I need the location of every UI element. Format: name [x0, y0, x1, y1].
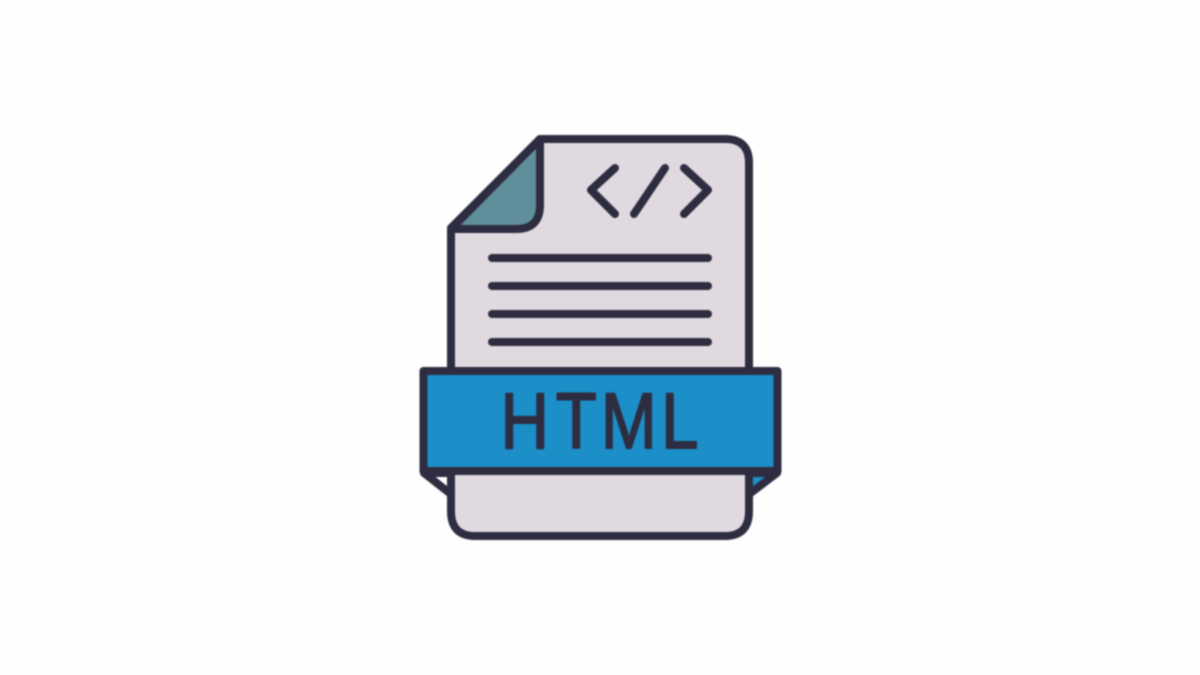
text lines [492, 258, 708, 342]
ribbon [424, 371, 778, 471]
page corner fold [451, 139, 540, 229]
ribbon label: HTML [501, 378, 698, 465]
ribbon back fold: left [424, 473, 452, 495]
code symbol [591, 168, 708, 214]
document page [451, 139, 749, 536]
ribbon back fold: right [748, 473, 777, 495]
icon: HTML file [424, 139, 778, 536]
